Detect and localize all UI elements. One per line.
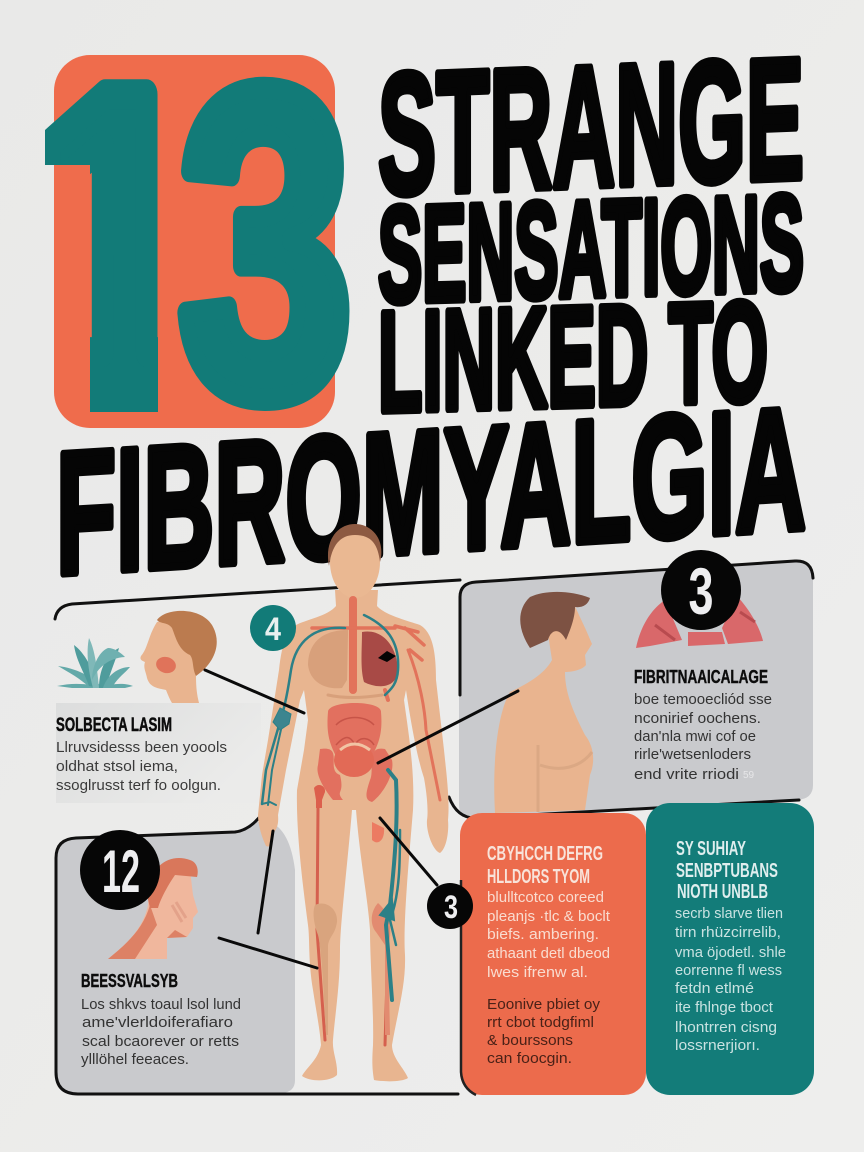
heading: HLLDORS TYOM	[487, 866, 590, 888]
number badge 3: 3	[688, 554, 714, 628]
connector lines	[205, 670, 518, 968]
text block: Los shkvs toaul lsol lund	[81, 996, 241, 1013]
text block: fetdn etlmé	[675, 980, 754, 997]
text block: 59	[743, 770, 755, 781]
text block: ssoglrusst terf fo oolgun.	[56, 777, 221, 794]
text block: secrb slarve tlien	[675, 905, 783, 922]
text block: light: biefs. ambering.	[487, 926, 599, 943]
number badge 12	[80, 830, 160, 910]
text block: tirn rhüzcirrelib,	[675, 924, 781, 941]
text block: end vrite rriodi	[634, 766, 739, 783]
heading	[676, 838, 778, 903]
text block: ame'vlerldoiferafiaro	[82, 1014, 233, 1031]
knees	[314, 903, 390, 1035]
text block: dark: rrt cbot todgfiml	[487, 1014, 594, 1031]
heading	[487, 843, 603, 888]
text block	[634, 691, 772, 783]
text block: dark: Eoonive pbiet oy	[487, 996, 600, 1013]
text block: lhontrren cisng	[675, 1019, 777, 1036]
text block: light	[487, 889, 611, 981]
text block: dark: & bourssons	[487, 1032, 573, 1049]
panel: top left outline	[55, 580, 460, 619]
icon: head with facial marks	[108, 858, 198, 959]
text block: boe temooecliód sse	[634, 691, 772, 708]
intestines and pelvis	[314, 703, 392, 842]
icon: plant leaves	[57, 638, 133, 688]
title	[56, 23, 806, 611]
text block: rirle'wetsenloders	[634, 746, 751, 763]
panel: orange card	[460, 813, 646, 1095]
lungs	[308, 630, 398, 688]
text block: ite fhlnge tboct	[675, 999, 774, 1016]
panel: teal card	[646, 803, 814, 1095]
number badge 4: 4	[265, 611, 281, 647]
heading: SY SUHIAY	[676, 838, 746, 860]
text block	[81, 996, 241, 1068]
heading: CBYHCCH DEFRG	[487, 843, 603, 865]
text block	[56, 739, 227, 794]
panel: beessvalsyb	[56, 814, 458, 1094]
icon: lungs arc	[636, 596, 763, 648]
text block: light: lwes ifrenw al.	[487, 964, 588, 981]
heading: SOLBECTA LASIM	[56, 715, 172, 736]
text block: scal bcaorever or retts	[82, 1033, 239, 1050]
text block: Llruvsidesss been yoools	[56, 739, 227, 756]
big number 13	[45, 76, 350, 412]
heading: NIOTH UNBLB	[677, 881, 768, 903]
heading: SENBPTUBANS	[676, 860, 778, 882]
icon: head profile with cheek mark	[140, 611, 217, 703]
panel: fibritnaaicalage	[449, 550, 813, 818]
text block: oldhat stsol iema,	[56, 758, 178, 775]
icon: man in profile	[494, 592, 593, 813]
text block: light: blulltcotco coreed	[487, 889, 604, 906]
number badge 4	[250, 605, 296, 651]
human body figure	[258, 524, 449, 1081]
heading: BEESSVALSYB	[81, 971, 178, 991]
face and hair	[328, 524, 381, 598]
text block: dan'nla mwi cof oe	[634, 728, 756, 745]
big number 13: 1	[28, 0, 206, 491]
heading: FIBRITNAAICALAGE	[634, 667, 768, 687]
text block: lossrnerjiorı.	[675, 1037, 760, 1054]
text block: eorrenne fl wess	[675, 962, 782, 979]
number badge 3 lower	[427, 883, 473, 929]
orange badge behind number	[54, 55, 335, 428]
text block: dark: can foocgin.	[487, 1050, 572, 1067]
trachea and arteries	[312, 600, 440, 1045]
number badge 3 lower: 3	[444, 889, 458, 925]
number badge 12: 12	[102, 838, 140, 905]
number badge 3	[661, 550, 741, 630]
text block: light: athaant detl dbeod	[487, 945, 610, 962]
text block: ylllöhel feeaces.	[81, 1051, 189, 1068]
text block: dark	[487, 996, 600, 1067]
text block: vma öjodetl. shle	[675, 944, 786, 961]
text block: light: pleanjs ·tlc & boclt	[487, 908, 611, 925]
big number 13: 3	[178, 0, 353, 489]
panel: solbecta lasim	[56, 611, 261, 803]
veins: teal	[262, 615, 400, 1000]
text block	[675, 905, 786, 1054]
text block: nconirief oochens.	[634, 710, 761, 727]
